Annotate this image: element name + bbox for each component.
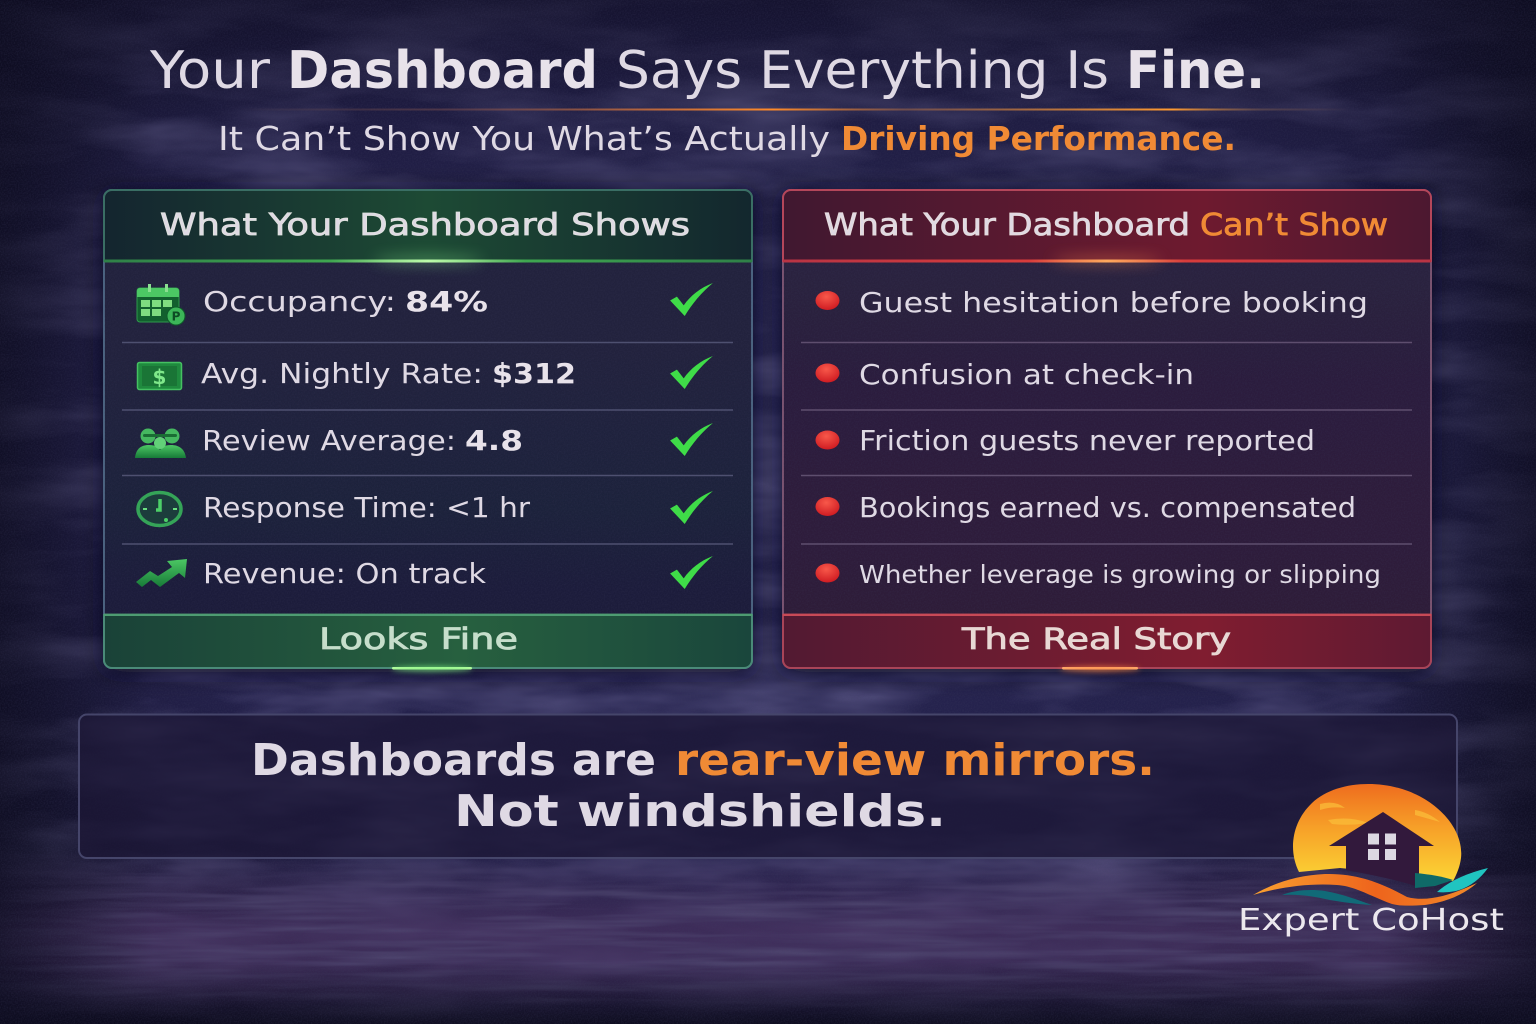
icon: check	[670, 491, 713, 524]
icon: red bullet	[816, 497, 840, 516]
panel footer: looks fine	[104, 614, 752, 672]
icon: check	[670, 283, 713, 316]
panel header: can't show: Can’t Show	[1200, 208, 1388, 243]
row: response time: Response Time: <1 hr	[203, 491, 531, 524]
title: Says Everything Is	[616, 41, 1109, 101]
subtitle	[218, 119, 1236, 158]
icon: red bullet	[816, 364, 840, 382]
row: response time	[138, 491, 713, 526]
icon: check	[670, 423, 713, 456]
panel footer: the real story	[783, 614, 1431, 672]
icon: calendar	[137, 284, 185, 325]
panel: what your dashboard can't show	[783, 190, 1431, 672]
row: revenue	[136, 556, 713, 590]
row: nightly rate: Avg. Nightly Rate:	[201, 357, 483, 390]
subtitle: Driving Performance.	[841, 119, 1236, 158]
logo: expert cohost: Expert CoHost	[1238, 903, 1504, 938]
icon: calendar: P	[172, 310, 181, 324]
row: occupancy: Occupancy:	[203, 285, 396, 318]
row: guest hesitation: Guest hesitation before booking	[859, 286, 1368, 319]
icon: people	[135, 428, 186, 458]
panel header: dashboard shows	[104, 190, 752, 263]
row: nightly rate: $312	[492, 357, 576, 390]
icon: red bullet	[816, 564, 840, 582]
icon: clock	[138, 492, 181, 526]
icon: sun streaks	[1320, 803, 1440, 825]
icon: check	[670, 556, 713, 589]
logo: expert cohost	[1238, 784, 1504, 938]
row: confusion at check-in: Confusion at check-in	[859, 358, 1194, 391]
icon: trend arrow	[136, 559, 187, 587]
callout: rear-view mirrors: Dashboards are	[251, 735, 656, 786]
icon: orange wave	[1253, 874, 1477, 906]
title: Dashboard	[287, 41, 598, 101]
panel footer: the real story: The Real Story	[961, 622, 1231, 656]
row: bookings earned: Bookings earned vs. compensated	[859, 491, 1356, 524]
panel: what your dashboard shows	[104, 190, 752, 672]
row: review average	[135, 423, 713, 458]
callout: rear-view mirrors: rear-view mirrors.	[675, 735, 1155, 786]
row: occupancy	[137, 283, 713, 325]
panel header: can't show	[783, 190, 1431, 263]
title: Your	[149, 41, 271, 101]
row: nightly rate	[138, 356, 713, 390]
panel footer: looks fine: Looks Fine	[319, 622, 518, 656]
row: occupancy: 84%	[405, 285, 488, 318]
panel header: dashboard shows: What Your Dashboard Shows	[160, 208, 690, 243]
icon: check	[670, 356, 713, 389]
row: revenue: Revenue: On track	[203, 557, 487, 590]
row: review average: Review Average:	[202, 424, 456, 457]
title divider	[240, 108, 1350, 110]
icon: house window	[1368, 834, 1396, 860]
panel header: can't show: What Your Dashboard	[824, 208, 1190, 243]
icon: dollar bill	[138, 362, 182, 390]
callout: rear-view mirrors	[79, 714, 1457, 858]
row: friction: Friction guests never reported	[859, 424, 1315, 457]
row: review average: 4.8	[465, 424, 523, 457]
icon: red bullet	[816, 291, 840, 310]
title: Fine.	[1126, 41, 1265, 101]
icon: sun	[1293, 784, 1461, 881]
icon: dollar bill: $	[153, 365, 166, 389]
icon: house	[1329, 812, 1434, 888]
icon: teal wave	[1282, 890, 1372, 905]
row: leverage: Whether leverage is growing or slipping	[859, 560, 1381, 589]
icon: teal swoosh	[1437, 868, 1488, 892]
icon: red bullet	[816, 430, 840, 450]
subtitle: It Can’t Show You What’s Actually	[218, 119, 830, 158]
title	[149, 41, 1265, 101]
icon: teal hill	[1415, 873, 1453, 888]
callout: rear-view mirrors: Not windshields.	[454, 786, 946, 837]
